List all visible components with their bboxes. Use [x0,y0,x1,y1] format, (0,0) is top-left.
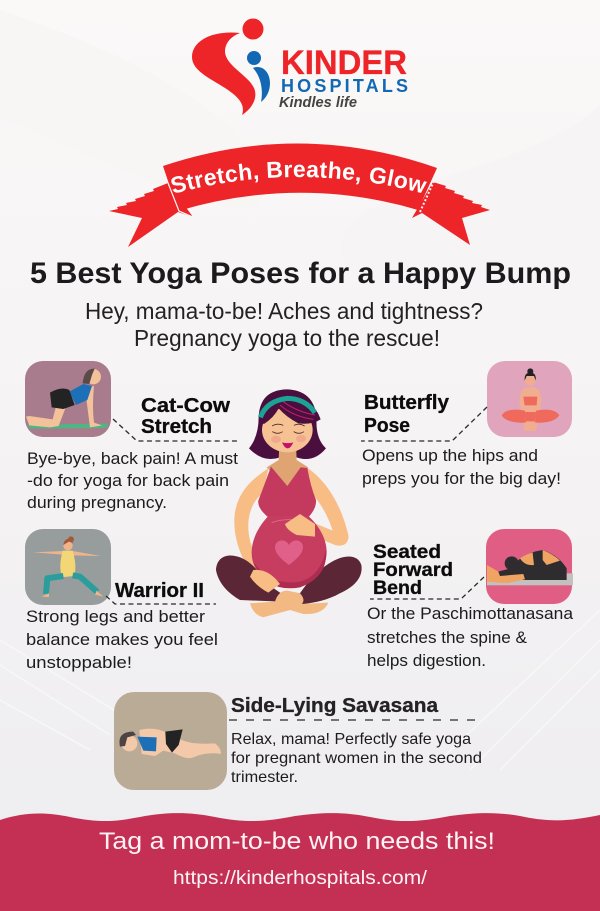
belly shading [253,550,326,588]
logo mark: blue circle [247,51,261,65]
belly [252,516,327,587]
subtitle: Pregnancy yoga to the rescue! [134,325,440,351]
cat-cow heading: Stretch [141,416,212,438]
feet [250,591,328,617]
seated bend heading [373,542,453,599]
lower hand [250,570,280,593]
cat-cow connector [113,419,240,441]
cat-cow heading: Cat-Cow [141,395,230,417]
seated bend heading: Bend [373,578,422,599]
savasana image card [114,692,227,790]
savasana description: trimester. [231,769,298,786]
seated bend description: Or the Paschimottanasana [367,605,574,623]
butterfly description [362,447,561,488]
title: 5 Best Yoga Poses for a Happy Bump [30,257,571,290]
ribbon right tail [412,182,490,245]
warrior image card [25,529,111,605]
waist crease [272,520,307,523]
seated bend heading: Forward [373,560,453,581]
seated bend description [367,605,574,670]
panel: butterfly pose [361,361,572,488]
logo tagline: Kindles life [279,94,357,111]
footer band [0,813,600,911]
call to action: Tag a mom-to-be who needs this! [99,828,495,855]
headband [260,398,315,417]
warrior description: unstoppable! [26,654,132,672]
logo word: KINDER: KINDER [281,44,407,82]
seated bend image card [486,529,573,604]
panel: warrior II [25,529,218,672]
savasana divider [229,719,483,721]
fringe highlights [280,402,315,419]
butterfly connector [361,407,487,441]
ribbon right stitched edge [420,181,434,212]
cat-cow description [27,450,238,512]
fringe [259,395,321,424]
logo [192,18,408,115]
face [262,408,313,452]
cat-cow description: during pregnancy. [27,494,167,512]
warrior description: balance makes you feel [26,631,218,649]
central pregnant woman illustration [216,389,362,617]
savasana description: Relax, mama! Perfectly safe yoga [231,731,471,748]
butterfly heading: Pose [364,415,410,437]
cat-cow heading [141,395,230,438]
seated bend connector [370,577,484,599]
panel: seated forward bend [367,529,574,670]
butterfly description: preps you for the big day! [362,470,561,488]
savasana description: for pregnant women in the second [231,750,482,767]
left arm [234,468,268,580]
panel: cat-cow stretch [25,361,240,512]
seated bend heading: Seated [373,542,441,563]
cat-cow description: Bye-bye, back pain! A must [27,450,238,468]
seated bend description: stretches the spine & [367,629,527,647]
neck and chest [267,443,308,488]
upper hand [285,514,315,537]
lips [282,442,293,448]
ribbon left fold line [168,183,193,217]
butterfly description: Opens up the hips and [362,447,538,465]
savasana heading: Side-Lying Savasana [231,695,439,717]
subtitle: Hey, mama-to-be! Aches and tightness? [85,298,483,324]
belly heart [275,540,303,565]
logo mark: red circle [242,18,264,40]
cat-cow image card [25,361,111,437]
seated bend description: helps digestion. [367,652,486,670]
ribbon banner [109,144,490,247]
savasana description [231,731,482,786]
butterfly heading: Butterfly [364,392,450,414]
right arm [307,467,348,546]
footer wave [0,813,600,911]
dress top [258,467,316,517]
legs [216,556,362,604]
logo mark: blue crescent [253,67,270,102]
cheeks [271,436,281,443]
back hair [249,389,326,459]
butterfly heading [364,392,450,437]
warrior heading: Warrior II [115,580,204,602]
warrior description [26,608,218,672]
warrior description: Strong legs and better [26,608,206,626]
logo mark: red swoosh [192,32,255,115]
cat-cow description: -do for yoga for back pain [27,472,229,490]
butterfly image card [487,361,572,437]
ribbon left tail [109,183,193,247]
eyes [272,424,305,433]
warrior connector [106,596,216,604]
ribbon text: Stretch, Breathe, Glow [171,161,427,193]
website url: https://kinderhospitals.com/ [173,868,428,889]
logo word: HOSPITALS: HOSPITALS [281,76,408,96]
subtitle [85,298,483,351]
ribbon main band [163,143,437,211]
panel: side-lying savasana [114,692,483,790]
